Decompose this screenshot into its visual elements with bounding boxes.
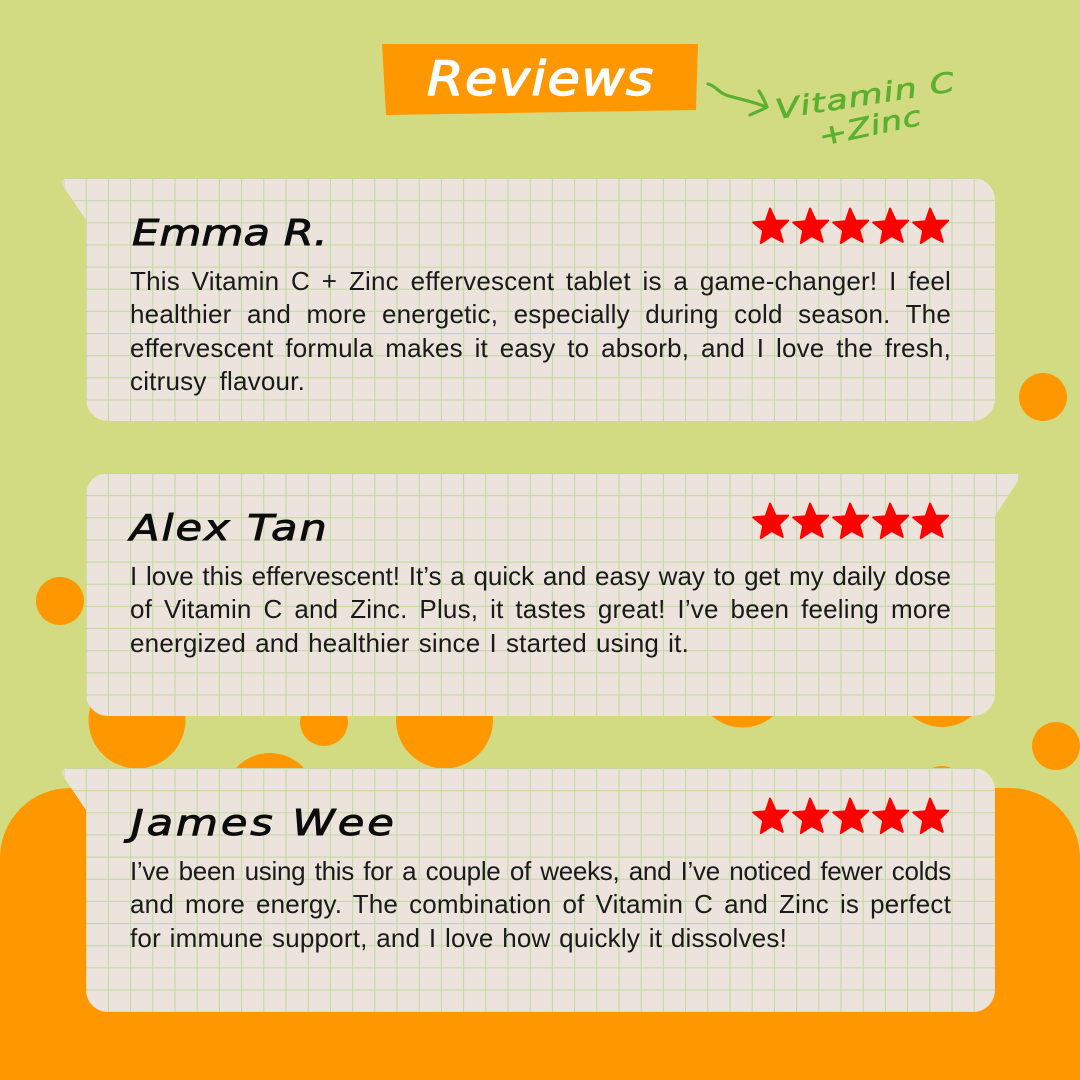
panel: review Emma R.: This Vitamin C + Zinc effervescent tablet is a game-changer! I feel xyxy=(130,266,951,296)
panel: review Alex Tan xyxy=(86,473,1020,716)
panel: review James Wee: I’ve been using this for a couple of weeks, and I’ve noticed fewer colds xyxy=(130,856,951,886)
panel: review Emma R.: citrusy flavour. xyxy=(130,366,305,396)
panel: review Alex Tan: I love this effervescent! It’s a quick and easy way to get my daily dose xyxy=(130,561,951,591)
panel: review James Wee: and more energy. The combination of Vitamin C and Zinc is perfect xyxy=(130,889,951,919)
handwritten note with arrow xyxy=(706,70,957,153)
panel: review Emma R.: effervescent formula makes it easy to absorb, and I love the fresh, xyxy=(130,333,951,363)
panel: review Alex Tan: of Vitamin C and Zinc. Plus, it tastes great! I’ve been feeling more xyxy=(130,594,951,624)
panel: review James Wee: James Wee xyxy=(123,802,394,844)
panel: review Emma R.: healthier and more energetic, especially during cold season. The xyxy=(130,299,951,329)
panel: review Alex Tan: Alex Tan xyxy=(127,507,327,549)
title banner xyxy=(382,44,698,115)
panel: review Alex Tan: energized and healthier since I started using it. xyxy=(130,628,689,658)
arrow xyxy=(708,84,767,115)
note text: +Zinc xyxy=(816,101,924,153)
panel: review Emma R. xyxy=(62,178,995,421)
note text xyxy=(773,67,957,153)
panel: review Emma R.: Emma R. xyxy=(132,212,328,254)
panel: review James Wee: for immune support, and I love how quickly it dissolves! xyxy=(130,923,787,953)
title banner: Reviews xyxy=(427,52,653,106)
panel: review James Wee xyxy=(62,768,995,1012)
